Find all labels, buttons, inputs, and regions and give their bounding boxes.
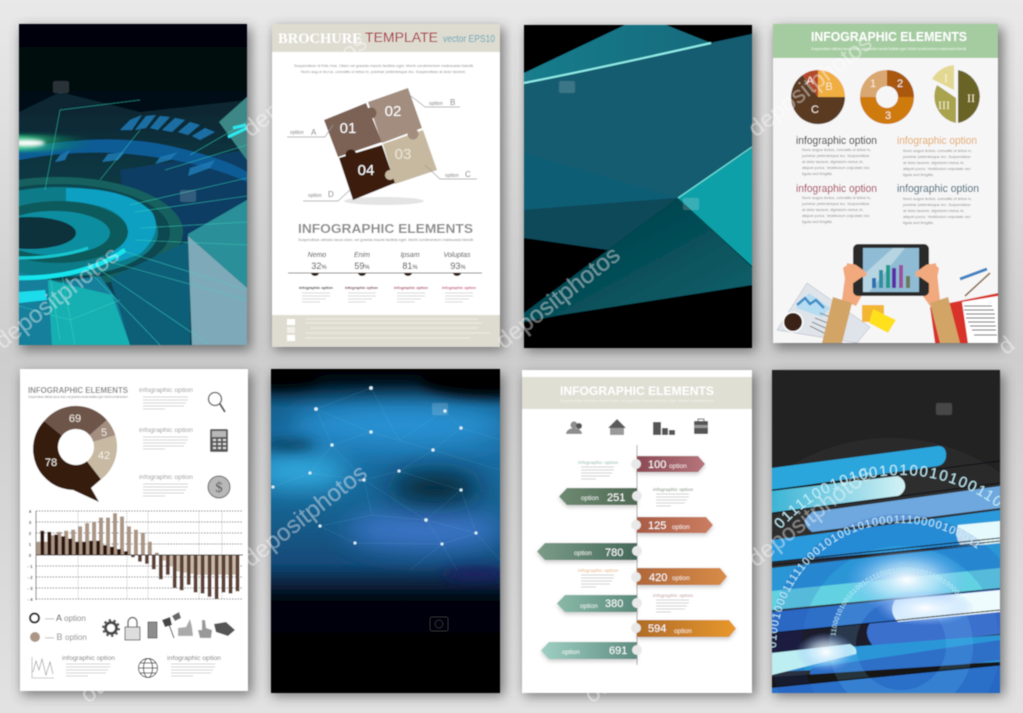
option callouts: C xyxy=(465,170,471,179)
text block: teal option: aliquet purus. Vestibulum vulputate nec xyxy=(903,214,971,219)
text block: teal option xyxy=(897,183,979,225)
watermarks: depositphotos xyxy=(743,29,877,143)
text block 1 xyxy=(139,387,194,409)
percent timeline: 93% xyxy=(450,261,466,271)
binary text arcs xyxy=(771,464,1000,648)
pie: A B C: A xyxy=(806,75,814,87)
donut: 1 2 3: 1 xyxy=(870,78,876,90)
heading: INFOGRAPHIC ELEMENTS xyxy=(28,386,129,395)
text block: teal note xyxy=(578,460,618,479)
bright light streaks xyxy=(524,43,711,83)
text block: red option xyxy=(796,183,877,224)
percent timeline: 81% xyxy=(402,261,418,271)
option callouts: B xyxy=(450,98,455,107)
option callouts: option xyxy=(290,130,304,136)
text block 2 xyxy=(139,427,194,449)
text block: teal option: Nunc augue lectus, convallis ut tellus in, xyxy=(903,196,972,201)
green header: INFOGRAPHIC ELEMENTS xyxy=(811,30,967,44)
central glow xyxy=(796,546,975,672)
icon: dollar coin: $ xyxy=(215,480,223,496)
text block: green note: infographic option xyxy=(653,487,693,492)
text block: orange option: ligula sed fringilla. xyxy=(903,172,934,177)
arrow: 420: 420 xyxy=(649,572,667,584)
pie: roman numerals: II xyxy=(967,91,975,105)
icon: flags xyxy=(162,612,181,638)
pie: roman numerals xyxy=(932,65,980,123)
puzzle diagram: 02 xyxy=(385,103,401,120)
pie: roman numerals: I xyxy=(944,71,948,85)
header band: INFOGRAPHIC ELEMENTS xyxy=(560,384,714,398)
puzzle diagram: 04 xyxy=(358,162,374,179)
watermarks: depositphotos xyxy=(238,29,372,143)
four option columns: infographic option xyxy=(299,285,334,290)
icon: coin stacks xyxy=(653,422,675,435)
arrow: 251 xyxy=(559,488,637,505)
header band xyxy=(522,377,752,409)
series B negative bars xyxy=(164,555,234,575)
panel: infographic options with pies xyxy=(773,24,998,343)
icon: people search xyxy=(566,421,582,434)
icon: briefcase xyxy=(694,419,708,434)
option callouts: D xyxy=(328,190,334,199)
legend: — A option xyxy=(45,613,86,623)
axis labels: - 3 xyxy=(27,586,33,591)
text block: teal option: ligula sed fringilla. xyxy=(903,220,934,225)
diagonal light bands xyxy=(772,446,1000,693)
text block: orange option: pulvinar pellentesque leo. Suspendisse xyxy=(903,154,970,159)
text block: black option: aliquet purus. Vestibulum vulputate nec xyxy=(802,165,870,170)
network lines xyxy=(317,388,500,570)
intro text xyxy=(294,63,474,74)
binary text arcs: 0111100101001010010100110010 xyxy=(774,464,1000,528)
lower glowing arcs xyxy=(19,250,125,278)
donut: 1 2 3: 3 xyxy=(885,110,891,122)
header band: Suspendisse ultricies lacus dolor, vel gravida mauris facilisis eget. Morbi condimentum xyxy=(560,398,715,403)
header band: BROCHURE xyxy=(278,31,362,47)
arrow: 420 xyxy=(637,568,727,585)
icon: calculator xyxy=(210,429,228,452)
icon: padlock xyxy=(125,618,140,640)
puzzle diagram: 01 xyxy=(340,120,356,137)
text block: orange option: Nunc augue lectus, convallis ut tellus in, xyxy=(903,148,972,153)
lower polygons xyxy=(18,272,130,346)
panel: brochure template xyxy=(272,24,500,347)
puzzle diagram xyxy=(324,88,437,205)
arrow: 251: 251 xyxy=(607,492,625,504)
text block: black option: Nunc augue lectus, convallis ut tellus in, xyxy=(802,147,871,152)
panel: teal polygon cover xyxy=(524,25,752,348)
axis labels xyxy=(27,509,33,602)
arrow: 691: option xyxy=(562,649,580,656)
option callouts: option xyxy=(445,173,459,179)
text block: bottom right xyxy=(167,655,222,676)
four option columns: infographic option xyxy=(394,285,429,290)
icon: book xyxy=(148,622,157,638)
text block: red option: Nunc augue lectus, convallis ut tellus in, xyxy=(802,195,871,200)
arrow: 380: 380 xyxy=(605,598,623,610)
binary text arcs: 110001010010100101110001100001001100100001011 xyxy=(830,568,968,636)
watermarks: depositphotos xyxy=(238,459,372,573)
icon: magnifier xyxy=(208,392,225,412)
four option columns: infographic option xyxy=(345,285,379,290)
four option columns: infographic option xyxy=(442,285,477,290)
pie: A B C xyxy=(791,70,845,124)
text block: teal option: infographic option xyxy=(897,183,979,195)
arrow: 125 xyxy=(637,517,713,533)
icon: globe xyxy=(138,658,158,678)
dark separators xyxy=(772,461,1000,687)
series A negative bars xyxy=(133,555,238,599)
puzzle diagram: 03 xyxy=(395,146,411,163)
arrow: 380 xyxy=(557,595,637,612)
arrow: 594 xyxy=(637,620,736,637)
pie: roman numerals: III xyxy=(938,98,950,112)
axis labels: - 1 xyxy=(27,564,33,569)
concentric circle overlay xyxy=(772,514,1000,693)
text block: orange option: aliquet purus. Vestibulum vulputate nec xyxy=(903,166,971,171)
text block: red option: pulvinar pellentesque leo. Suspendisse xyxy=(802,201,869,206)
header band: TEMPLATE xyxy=(365,29,438,45)
donut: 1 2 3: 2 xyxy=(897,78,903,90)
text block: teal option: pulvinar pellentesque leo. Suspendisse xyxy=(903,202,970,207)
bright capsules xyxy=(772,590,1000,675)
cyan wedge of ring xyxy=(66,188,156,262)
arrow: 100 xyxy=(637,456,705,472)
icon: faint camera xyxy=(430,617,448,631)
arrow: 691: 691 xyxy=(609,645,627,657)
icon: gear xyxy=(103,620,119,636)
text block: teal note: infographic option xyxy=(578,460,618,465)
text block: red option: infographic option xyxy=(796,183,877,195)
illustration: hands holding tablet xyxy=(822,244,960,343)
text block: teal option: at dolor laoreet, dignissim metus et, xyxy=(903,208,964,213)
text block: orange option: at dolor laoreet, dignissim metus et, xyxy=(903,160,964,165)
text block: bottom left xyxy=(62,655,116,676)
arrow: 780: 780 xyxy=(605,547,623,559)
panel: binary code cover xyxy=(771,369,1001,694)
illustration: documents and notebook xyxy=(777,269,998,343)
arrow: 594: option xyxy=(674,628,692,635)
subheading: Suspendisse ultricies lacus dolor, vel gravida mauris facilisis eget. Morbi condimentum xyxy=(28,395,128,399)
outer blue ring xyxy=(19,139,247,182)
panel: brown chart infographic xyxy=(20,369,248,691)
pie: A B C: C xyxy=(811,104,819,116)
percent timeline: Ipsam xyxy=(400,252,420,259)
icon: handshake xyxy=(214,622,235,636)
thin circuit lines xyxy=(19,100,247,345)
percent timeline xyxy=(288,252,482,276)
heading: INFOGRAPHIC ELEMENTS xyxy=(298,221,473,236)
legend xyxy=(30,613,87,642)
text block: orange option: infographic option xyxy=(897,135,977,147)
text block: green note xyxy=(653,487,693,506)
green header: Suspendisse ultricies lacus dolor, vel gravida mauris facilisis eget. Morbi condimentum malesuada blandit. xyxy=(811,46,967,51)
text block: black option: pulvinar pellentesque leo. Suspendisse xyxy=(802,153,869,158)
right dark blue sector xyxy=(120,150,247,240)
teal ring base xyxy=(18,186,158,278)
donut speech bubble chart: 69 xyxy=(69,413,81,425)
axis labels: - 2 xyxy=(27,575,33,580)
camera watermark icons xyxy=(53,81,952,415)
pie: A B C: B xyxy=(825,81,833,93)
text block: red option: aliquet purus. Vestibulum vulputate nec xyxy=(802,213,870,218)
panel: blue network cover xyxy=(270,368,501,694)
subheading: Suspendisse ultricies lacus dolor, vel gravida mauris facilisis eget. Morbi condimentum malesuada blandit. xyxy=(298,237,474,242)
legend: — B option xyxy=(45,632,87,642)
axis labels: 3 xyxy=(29,520,32,525)
blue light clouds xyxy=(270,372,500,584)
arrow: 420: option xyxy=(672,575,690,582)
arrow: 125: option xyxy=(672,524,690,531)
network nodes xyxy=(272,386,478,546)
icon: dollar coin xyxy=(208,476,230,498)
axis labels: 2 xyxy=(29,531,32,536)
text block: red option: ligula sed fringilla. xyxy=(802,219,833,224)
green light flare xyxy=(0,135,96,151)
text block: black option: infographic option xyxy=(796,135,877,147)
donut: 1 2 3 xyxy=(860,70,914,124)
panel: timeline infographic xyxy=(522,370,752,693)
arrow: 100: option xyxy=(669,463,687,470)
axis labels: 1 xyxy=(29,542,32,547)
icon: line graph xyxy=(32,657,54,678)
series A positive bars xyxy=(42,531,126,555)
bar chart xyxy=(27,509,243,602)
text block 1: infographic option xyxy=(139,387,194,394)
text block: orange note xyxy=(578,568,618,587)
text block 3 xyxy=(139,474,194,496)
icon: thumb up xyxy=(178,619,193,636)
donut speech bubble chart: 42 xyxy=(98,450,110,462)
icon: pointing hand xyxy=(198,620,212,638)
arrow: 691 xyxy=(541,642,637,659)
donut speech bubble chart: 5 xyxy=(101,427,107,439)
watermarks: otos xyxy=(75,660,127,709)
percent timeline: Voluptas xyxy=(444,252,471,259)
text block: bottom left: infographic option xyxy=(62,655,116,662)
arrow: 100: 100 xyxy=(648,459,666,471)
dashed ring segments xyxy=(55,115,215,176)
arrow: 380: option xyxy=(580,603,598,610)
percent timeline: Nemo xyxy=(308,252,326,259)
timeline nodes xyxy=(631,459,642,655)
four option columns xyxy=(299,285,477,302)
arrow: 251: option xyxy=(581,495,599,502)
header band xyxy=(272,24,500,52)
donut speech bubble chart: 78 xyxy=(45,457,57,469)
icon: house xyxy=(608,419,626,435)
arrow: 594: 594 xyxy=(648,623,666,635)
axis labels: 4 xyxy=(29,509,32,514)
icon row xyxy=(103,612,235,640)
intro text: Suspendisse id felis lima. Etiam vel gravida mauris facilisis eget. Morbi condimentum malesuada blandit. xyxy=(294,63,474,68)
arrow: 125: 125 xyxy=(648,520,666,532)
panel: teal technology cover xyxy=(0,24,247,345)
watermarks: otos xyxy=(579,660,631,709)
percent timeline: 32% xyxy=(311,261,327,271)
header band: vector EPS10 xyxy=(443,34,495,45)
arrow: 780 xyxy=(537,543,637,560)
text block 3: infographic option xyxy=(139,474,194,481)
axis labels: 0 xyxy=(29,553,32,558)
text block: black option: ligula sed fringilla. xyxy=(802,171,833,176)
text block: black option xyxy=(796,135,877,176)
timeline spine xyxy=(636,445,638,665)
intro text: Nunc augue lectus, convallis ut tellus in, pulvinar pellentesque leo. Suspendisse at dolor laoreet. xyxy=(301,69,466,74)
option callouts: A xyxy=(311,128,317,137)
green ring xyxy=(18,176,184,283)
donut speech bubble chart xyxy=(33,406,117,502)
option callouts: option xyxy=(429,101,443,107)
arrow: 780: option xyxy=(574,550,592,557)
percent timeline: Enim xyxy=(354,252,370,259)
watermarks: depositphotos xyxy=(743,459,877,573)
text block: black option: at dolor laoreet, dignissim metus et, xyxy=(802,159,863,164)
series B bars xyxy=(38,513,157,555)
axis labels: - 4 xyxy=(27,597,33,602)
text block: rose note: infographic option xyxy=(653,593,693,598)
text block: red option: at dolor laoreet, dignissim metus et, xyxy=(802,207,863,212)
text block: bottom right: infographic option xyxy=(167,655,222,662)
text block: rose note xyxy=(653,593,693,612)
percent timeline: 59% xyxy=(354,261,370,271)
option callouts: option xyxy=(308,193,322,199)
text block: orange option xyxy=(897,135,977,177)
text block: orange note: infographic option xyxy=(578,568,618,573)
watermarks: depositphotos xyxy=(491,241,625,355)
option callouts xyxy=(287,96,477,201)
text block 2: infographic option xyxy=(139,427,194,434)
watermarks: d xyxy=(993,331,1020,361)
footer band xyxy=(272,315,500,347)
binary text arcs: 0100100011111000101001010001110000100011 xyxy=(771,515,980,648)
green header xyxy=(773,24,998,58)
